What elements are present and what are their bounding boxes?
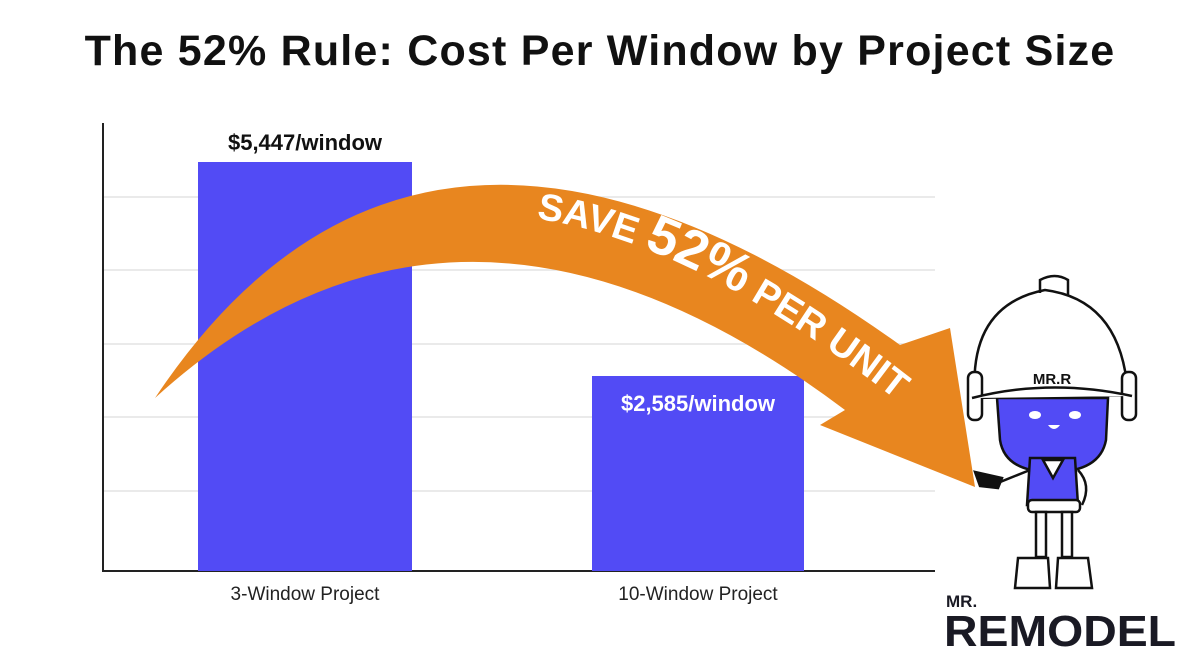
bar: 10-window: $2,585/window: [621, 391, 776, 416]
body: [1027, 458, 1078, 505]
robot face: [997, 398, 1108, 472]
bar: 10-window: [592, 376, 804, 605]
arrow: savings: SAVE 52% PER UNIT: [538, 194, 912, 394]
logo: MR.: [946, 592, 977, 611]
bar: 10-window: 10-Window Project: [618, 584, 778, 605]
arrow: savings: [155, 184, 975, 487]
mascot robot: [968, 276, 1136, 588]
title: The 52% Rule: Cost Per Window by Project Size: [85, 27, 1115, 75]
bar: 3-window: [198, 130, 412, 605]
bar: 3-window: $5,447/window: [228, 130, 383, 155]
bar: 3-window: 3-Window Project: [231, 584, 380, 605]
mascot robot: MR.R: [1033, 371, 1071, 388]
logo: REMODEL: [944, 607, 1176, 656]
